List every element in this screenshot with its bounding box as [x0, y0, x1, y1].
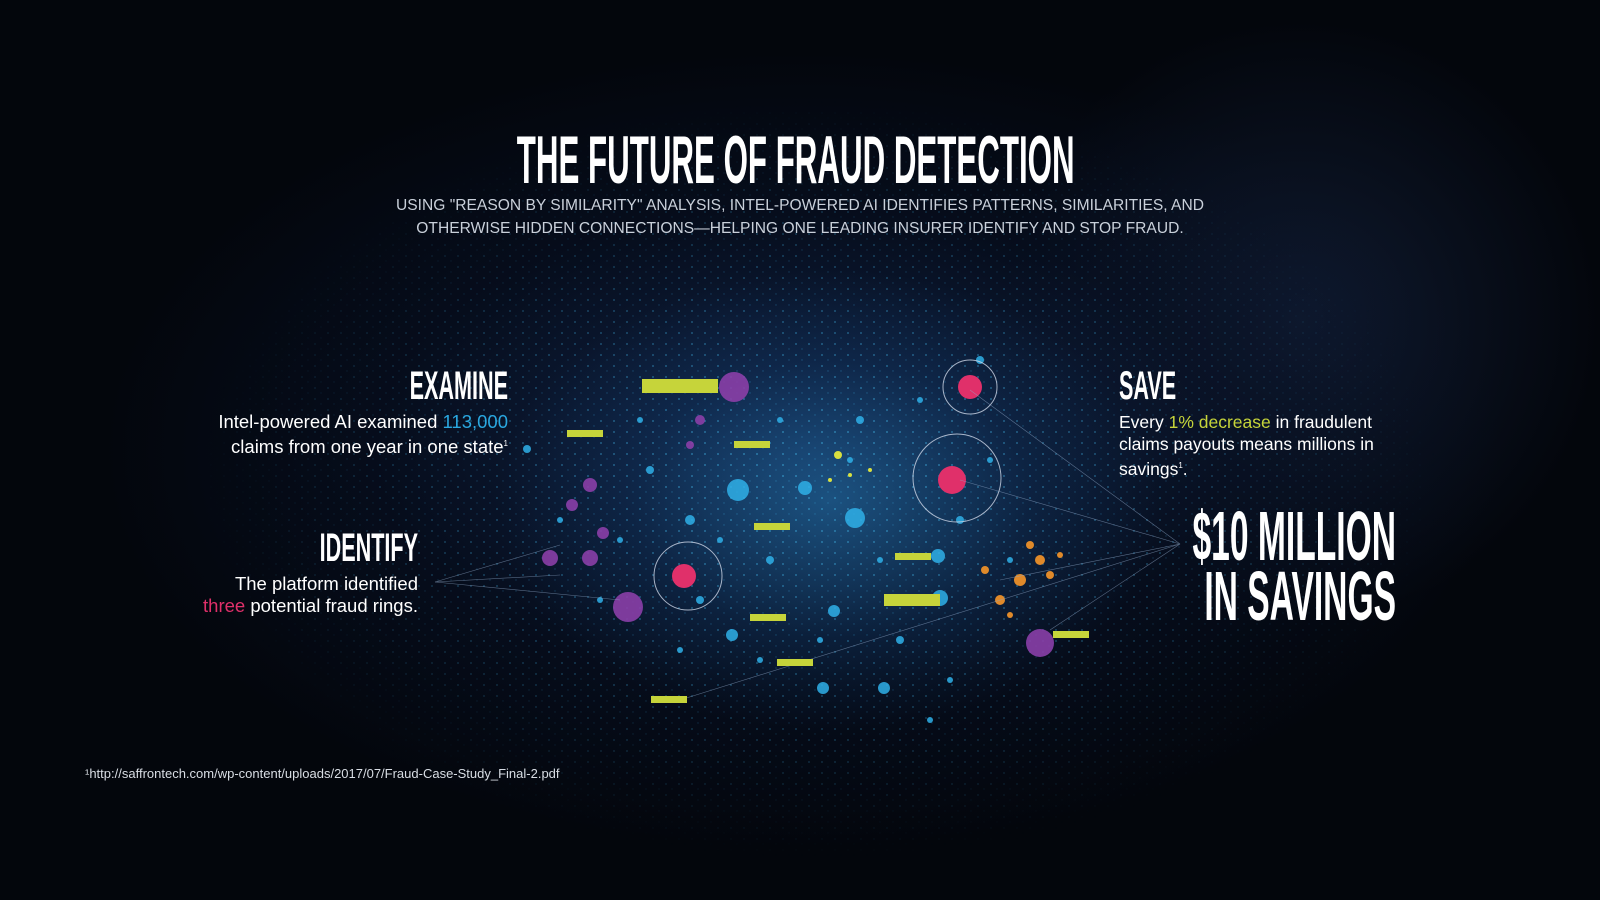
- yellow-green tags: [567, 379, 1089, 703]
- subtitle: [396, 197, 1204, 237]
- panel: identify: [203, 526, 418, 616]
- text: save: Every 1% decrease in fraudulent: [1119, 412, 1372, 432]
- text: examine: Intel-powered AI examined 113,000: [218, 411, 508, 432]
- connector lines: [435, 390, 1180, 700]
- text: examine: claims from one year in one state1: [231, 436, 508, 457]
- footnote: ¹http://saffrontech.com/wp-content/uploads/2017/07/Fraud-Case-Study_Final-2.pdf: [85, 766, 560, 781]
- background dot cloud: [236, 123, 1395, 840]
- heading: identify: IDENTIFY: [320, 526, 418, 570]
- subtitle: USING "REASON BY SIMILARITY" ANALYSIS, INTEL-POWERED AI IDENTIFIES PATTERNS, SIMILARITIES, AND: [396, 197, 1204, 214]
- heading: save: SAVE: [1119, 364, 1176, 408]
- heading: examine: EXAMINE: [410, 364, 508, 408]
- panel: examine: [218, 364, 508, 457]
- callout: $10 million in savings: IN SAVINGS: [1204, 557, 1396, 635]
- callout: $10 million in savings: $10 MILLION: [1192, 497, 1396, 575]
- subtitle: OTHERWISE HIDDEN CONNECTIONS—HELPING ONE LEADING INSURER IDENTIFY AND STOP FRAUD.: [416, 220, 1184, 237]
- fraud rings: [654, 360, 1001, 610]
- text: save: savings1.: [1119, 459, 1188, 479]
- text: save: [1119, 412, 1374, 479]
- text: identify: three potential fraud rings.: [203, 595, 418, 616]
- text: identify: The platform identified: [235, 573, 418, 594]
- text: examine: [218, 411, 508, 457]
- text: identify: [203, 573, 418, 616]
- panel: save: [1119, 364, 1374, 479]
- text: save: claims payouts means millions in: [1119, 434, 1374, 454]
- title: THE FUTURE OF FRAUD DETECTION: [517, 122, 1075, 198]
- callout: $10 million in savings: [1192, 497, 1396, 635]
